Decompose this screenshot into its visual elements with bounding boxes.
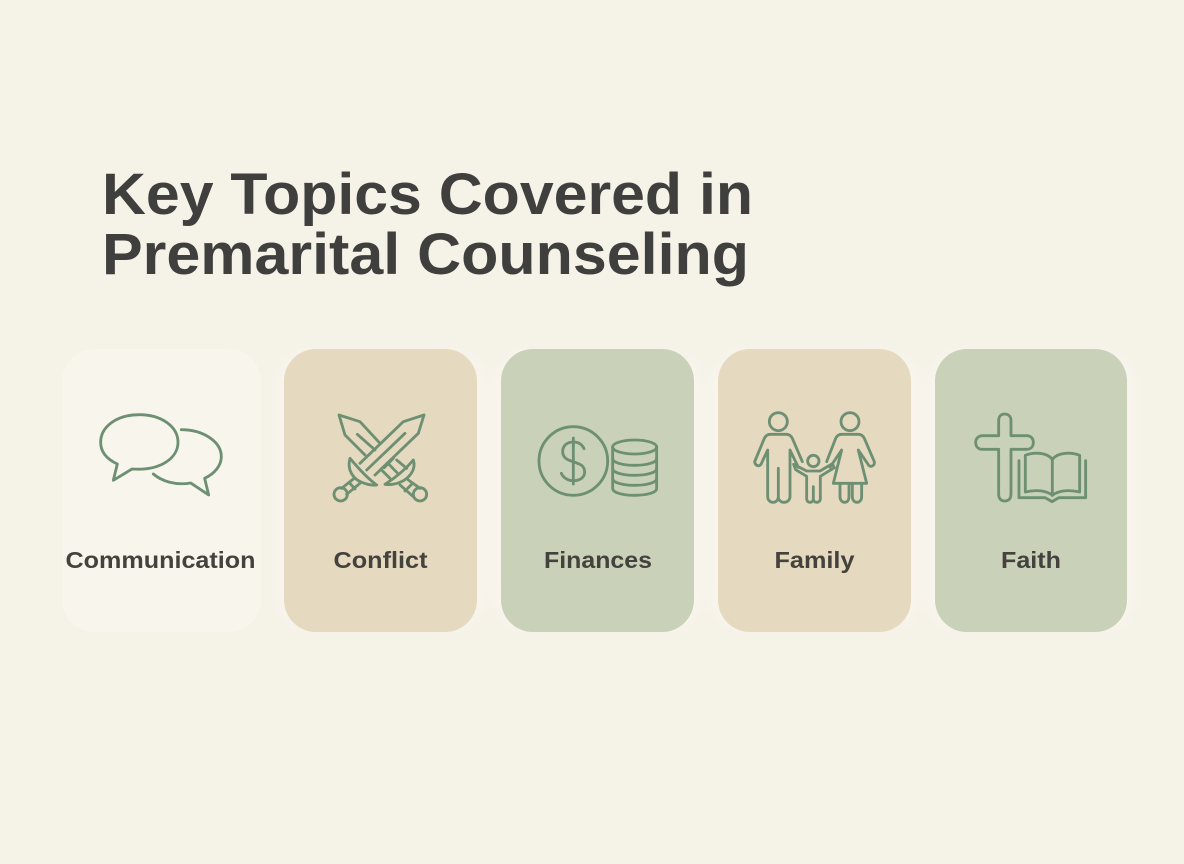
panel: faith [935, 349, 1127, 632]
icon: family holding hands [755, 413, 874, 502]
title [102, 162, 753, 287]
title: Key Topics Covered in [102, 162, 753, 227]
label: finances: Finances [544, 547, 652, 573]
panel: communication [62, 349, 261, 632]
icon: crossed swords [334, 415, 427, 501]
label: faith: Faith [1001, 547, 1061, 573]
icon: dollar coin and stack [539, 427, 657, 495]
panel: finances [501, 349, 694, 632]
panel: conflict [284, 349, 477, 632]
label: family: Family [774, 547, 855, 573]
icon: speech bubbles [101, 415, 221, 495]
title: Premarital Counseling [102, 222, 749, 287]
icon: cross and open bible [976, 414, 1086, 502]
label: conflict: Conflict [334, 547, 428, 573]
label: communication: Communication [66, 547, 256, 573]
panel: family [718, 349, 911, 632]
